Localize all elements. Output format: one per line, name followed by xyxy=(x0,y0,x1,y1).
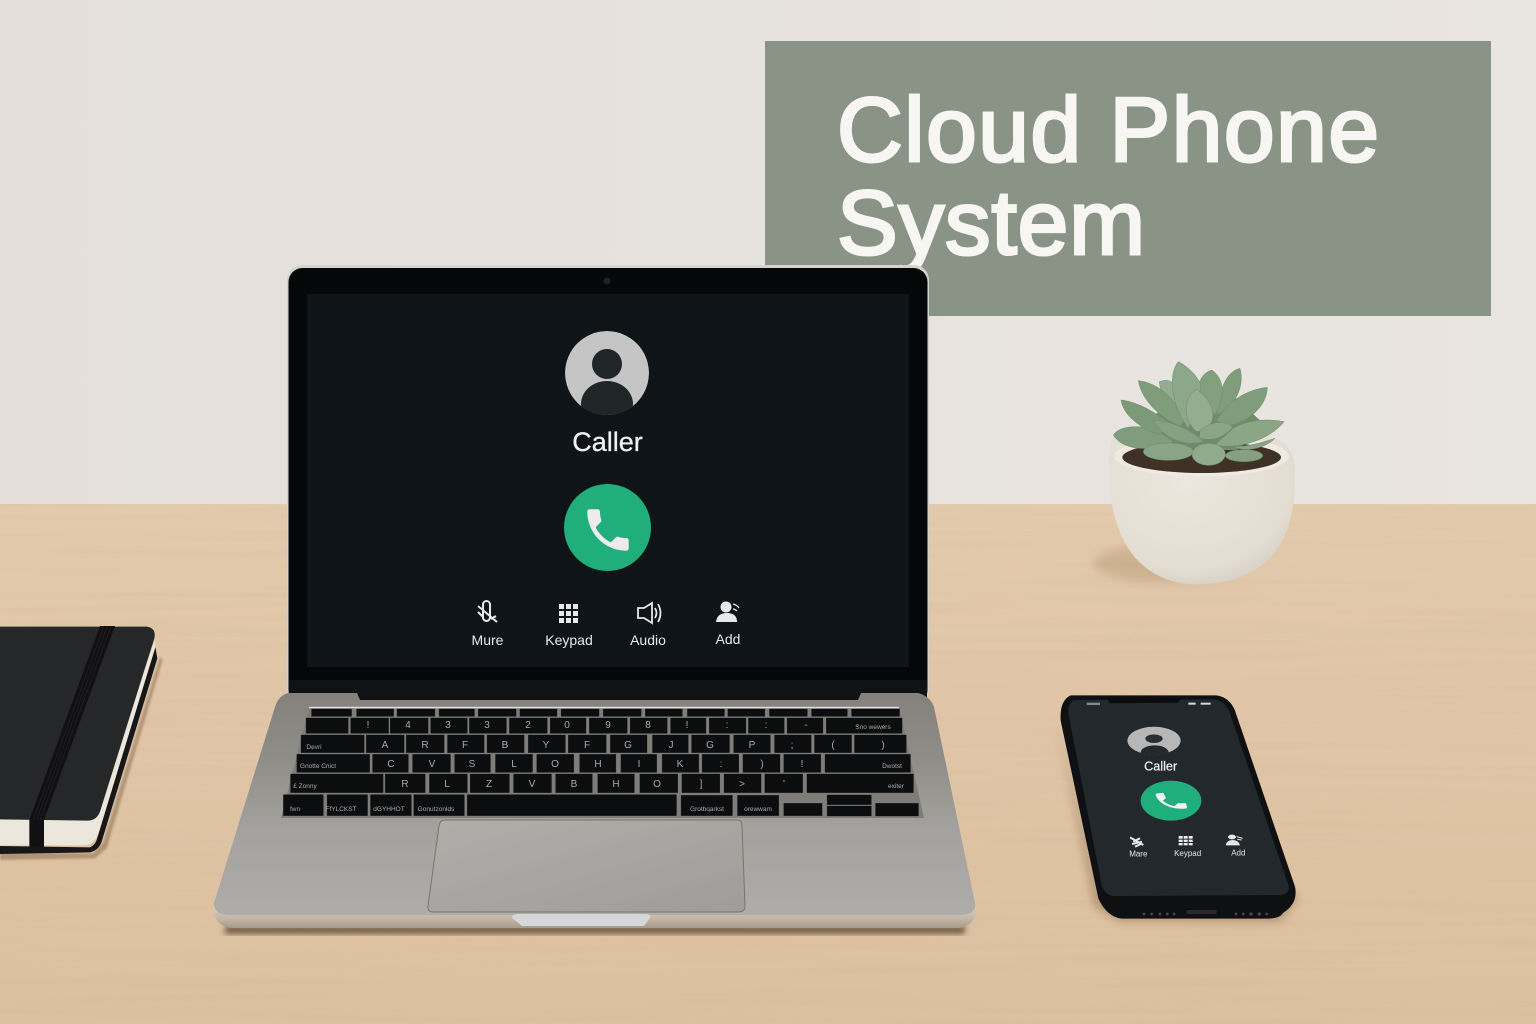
keyboard legends: FfYLCKST xyxy=(325,806,357,813)
keyboard legends: : xyxy=(726,720,728,731)
audio label: Audio xyxy=(630,632,666,648)
phone screen xyxy=(1068,699,1289,896)
phone shadow xyxy=(1058,723,1298,921)
notebook shadow xyxy=(0,657,163,860)
keyboard legends: 3 xyxy=(445,720,451,731)
keyboard legends: fwn xyxy=(290,806,300,813)
keyboard legends: : xyxy=(765,720,767,731)
keyboard legends: F xyxy=(462,740,468,751)
keyboard legends: - xyxy=(804,720,808,731)
keyboard legends: J xyxy=(668,740,674,751)
pot rim xyxy=(1114,435,1289,477)
keyboard legends: ) xyxy=(760,759,764,770)
caller avatar xyxy=(1127,726,1181,754)
lower bezel strip xyxy=(289,680,927,702)
keyboard legends: Dwotst xyxy=(882,763,902,770)
keyboard legends: Sno wewers xyxy=(855,724,891,731)
keyboard legends: dGYHHOT xyxy=(373,806,405,813)
mute label: Mare xyxy=(1129,850,1148,859)
keypad control xyxy=(545,604,593,648)
laptop base xyxy=(214,693,975,915)
title: Cloud Phone System: Cloud Phone xyxy=(837,80,1379,181)
add label: Add xyxy=(1231,848,1245,857)
keyboard legends: £ Zonny xyxy=(293,783,317,790)
status bar xyxy=(1087,703,1211,705)
keypad label: Keypad xyxy=(545,632,593,648)
phone body xyxy=(1061,695,1296,919)
keyboard legends: F xyxy=(584,740,590,751)
foliage backing xyxy=(1137,393,1267,450)
title: Cloud Phone System xyxy=(837,80,1379,274)
keyboard legends: Gnotte Cnict xyxy=(300,763,336,770)
pot xyxy=(1109,425,1295,584)
keyboard well xyxy=(281,707,924,818)
keyboard legends: C xyxy=(387,759,395,770)
laptop lid xyxy=(287,265,929,705)
laptop xyxy=(214,265,976,934)
caller label: Caller xyxy=(1144,760,1177,774)
keyboard legends: G xyxy=(706,740,714,751)
pages xyxy=(0,640,155,845)
keyboard legends: ] xyxy=(700,779,703,790)
keyboard legends: S xyxy=(469,759,476,770)
trackpad xyxy=(428,820,745,912)
keyboard legends: L xyxy=(444,779,450,790)
keyboard legends: B xyxy=(571,779,578,790)
keyboard legends: H xyxy=(594,759,602,770)
handset icon xyxy=(1155,791,1187,811)
succulent leaves xyxy=(1113,362,1284,465)
keyboard legends: 8 xyxy=(645,720,651,731)
laptop screen xyxy=(307,294,909,667)
keyboard legends: 2 xyxy=(525,720,531,731)
cover xyxy=(0,627,155,821)
keyboard legends: Grotbqarkst xyxy=(690,806,724,813)
smartphone xyxy=(1058,695,1298,921)
keyboard legends: 4 xyxy=(405,720,411,731)
add control xyxy=(716,602,740,647)
wooden desk xyxy=(0,504,1536,1024)
soil xyxy=(1122,442,1281,473)
keyboard legends: ( xyxy=(831,740,835,751)
back cover xyxy=(0,647,157,854)
keypad icon xyxy=(1179,836,1193,845)
keyboard legends: exiter xyxy=(888,783,905,790)
mute label: Mure xyxy=(472,632,504,648)
keyboard legends: B xyxy=(502,740,509,751)
keyboard legends: I xyxy=(638,759,640,770)
keyboard legends: Z xyxy=(486,779,492,790)
keyboard legends: K xyxy=(677,759,684,770)
caller label: Caller xyxy=(572,427,643,457)
pot shadow xyxy=(1093,545,1233,582)
keyboard legends: P xyxy=(749,740,756,751)
keyboard legends: 3 xyxy=(484,720,490,731)
keyboard legends: orewwam xyxy=(744,806,772,813)
base front lip xyxy=(214,905,976,928)
keyboard legends: V xyxy=(429,759,436,770)
keyboard legends: H xyxy=(612,779,620,790)
keypad label: Keypad xyxy=(1174,849,1201,858)
caller avatar xyxy=(565,331,649,415)
keyboard legends: Devri xyxy=(306,744,322,751)
keyboard legends: R xyxy=(401,779,409,790)
keyboard legends: V xyxy=(529,779,536,790)
keyboard legends: ! xyxy=(367,720,369,731)
keypad icon xyxy=(559,604,578,623)
keyboard legends: : xyxy=(720,759,722,770)
keyboard legends: L xyxy=(511,759,517,770)
keyboard legends: 9 xyxy=(605,720,611,731)
audio control xyxy=(630,603,666,648)
keyboard legends: O xyxy=(653,779,661,790)
keyboard legends: ! xyxy=(801,759,803,770)
mute icon xyxy=(1130,837,1143,847)
keyboard legends: Gonutzonlds xyxy=(418,806,455,813)
title: Cloud Phone System: System xyxy=(837,173,1145,274)
wall background xyxy=(0,0,1536,505)
mute control xyxy=(472,601,504,648)
notch xyxy=(1107,698,1182,703)
keyboard legends: Y xyxy=(543,740,550,751)
add label: Add xyxy=(716,631,740,647)
webcam xyxy=(604,278,610,284)
keyboard legends: O xyxy=(551,759,559,770)
notebook xyxy=(0,626,163,860)
add person icon xyxy=(716,602,739,622)
handset icon xyxy=(587,509,629,551)
keyboard legends xyxy=(290,720,905,813)
keyboard legends: 0 xyxy=(564,720,570,731)
elastic band xyxy=(29,626,115,847)
green call button xyxy=(564,484,651,571)
title panel xyxy=(765,41,1491,316)
keyboard legends: G xyxy=(624,740,632,751)
speaker icon xyxy=(638,603,660,623)
green call button xyxy=(1141,781,1201,821)
keyboard legends: R xyxy=(421,740,429,751)
keyboard legends: ' xyxy=(783,779,785,790)
laptop shadow xyxy=(225,926,965,934)
add icon xyxy=(1226,835,1243,845)
lid-opening notch xyxy=(512,914,650,926)
mute icon xyxy=(478,601,497,622)
plant in white pot xyxy=(1093,362,1295,584)
keyboard keys xyxy=(283,709,918,816)
speaker grille and port xyxy=(1143,910,1268,916)
keyboard legends: A xyxy=(382,740,389,751)
keyboard legends: ! xyxy=(686,720,688,731)
keyboard legends: ; xyxy=(791,740,793,751)
keyboard legends: > xyxy=(739,779,745,790)
keyboard legends: ) xyxy=(881,740,885,751)
